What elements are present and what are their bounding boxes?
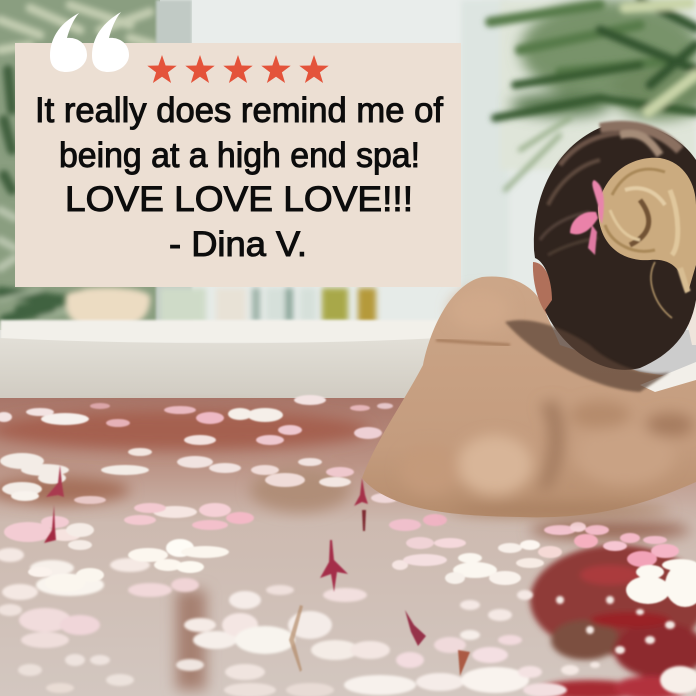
- floating petals, near: [0, 548, 696, 696]
- testimonial text: [35, 91, 443, 264]
- testimonial text: being at a high end spa!: [59, 136, 420, 175]
- floating petals, far: [0, 395, 466, 570]
- bathtub rim: [0, 320, 440, 400]
- woman: hair: [505, 123, 696, 392]
- bottles on the tub ledge: [65, 287, 376, 330]
- plumeria flowers in foreground: [28, 522, 696, 607]
- five star rating: [147, 55, 329, 83]
- water surface: [0, 398, 696, 696]
- flower stems: [44, 465, 470, 676]
- background: window and garden: [0, 0, 696, 330]
- background: tropical plant: [490, 0, 696, 190]
- icon: quotation marks: [50, 12, 129, 72]
- testimonial text: - Dina V.: [169, 225, 307, 264]
- pink flower in hair: [570, 180, 604, 255]
- testimonial text: LOVE LOVE LOVE!!!: [65, 180, 413, 219]
- woman: hair bun: [598, 158, 696, 318]
- woman: back and arm: [362, 276, 696, 517]
- review card: [15, 12, 461, 287]
- card background: [15, 43, 461, 287]
- testimonial text: It really does remind me of: [35, 91, 443, 130]
- woman: ear: [533, 262, 553, 320]
